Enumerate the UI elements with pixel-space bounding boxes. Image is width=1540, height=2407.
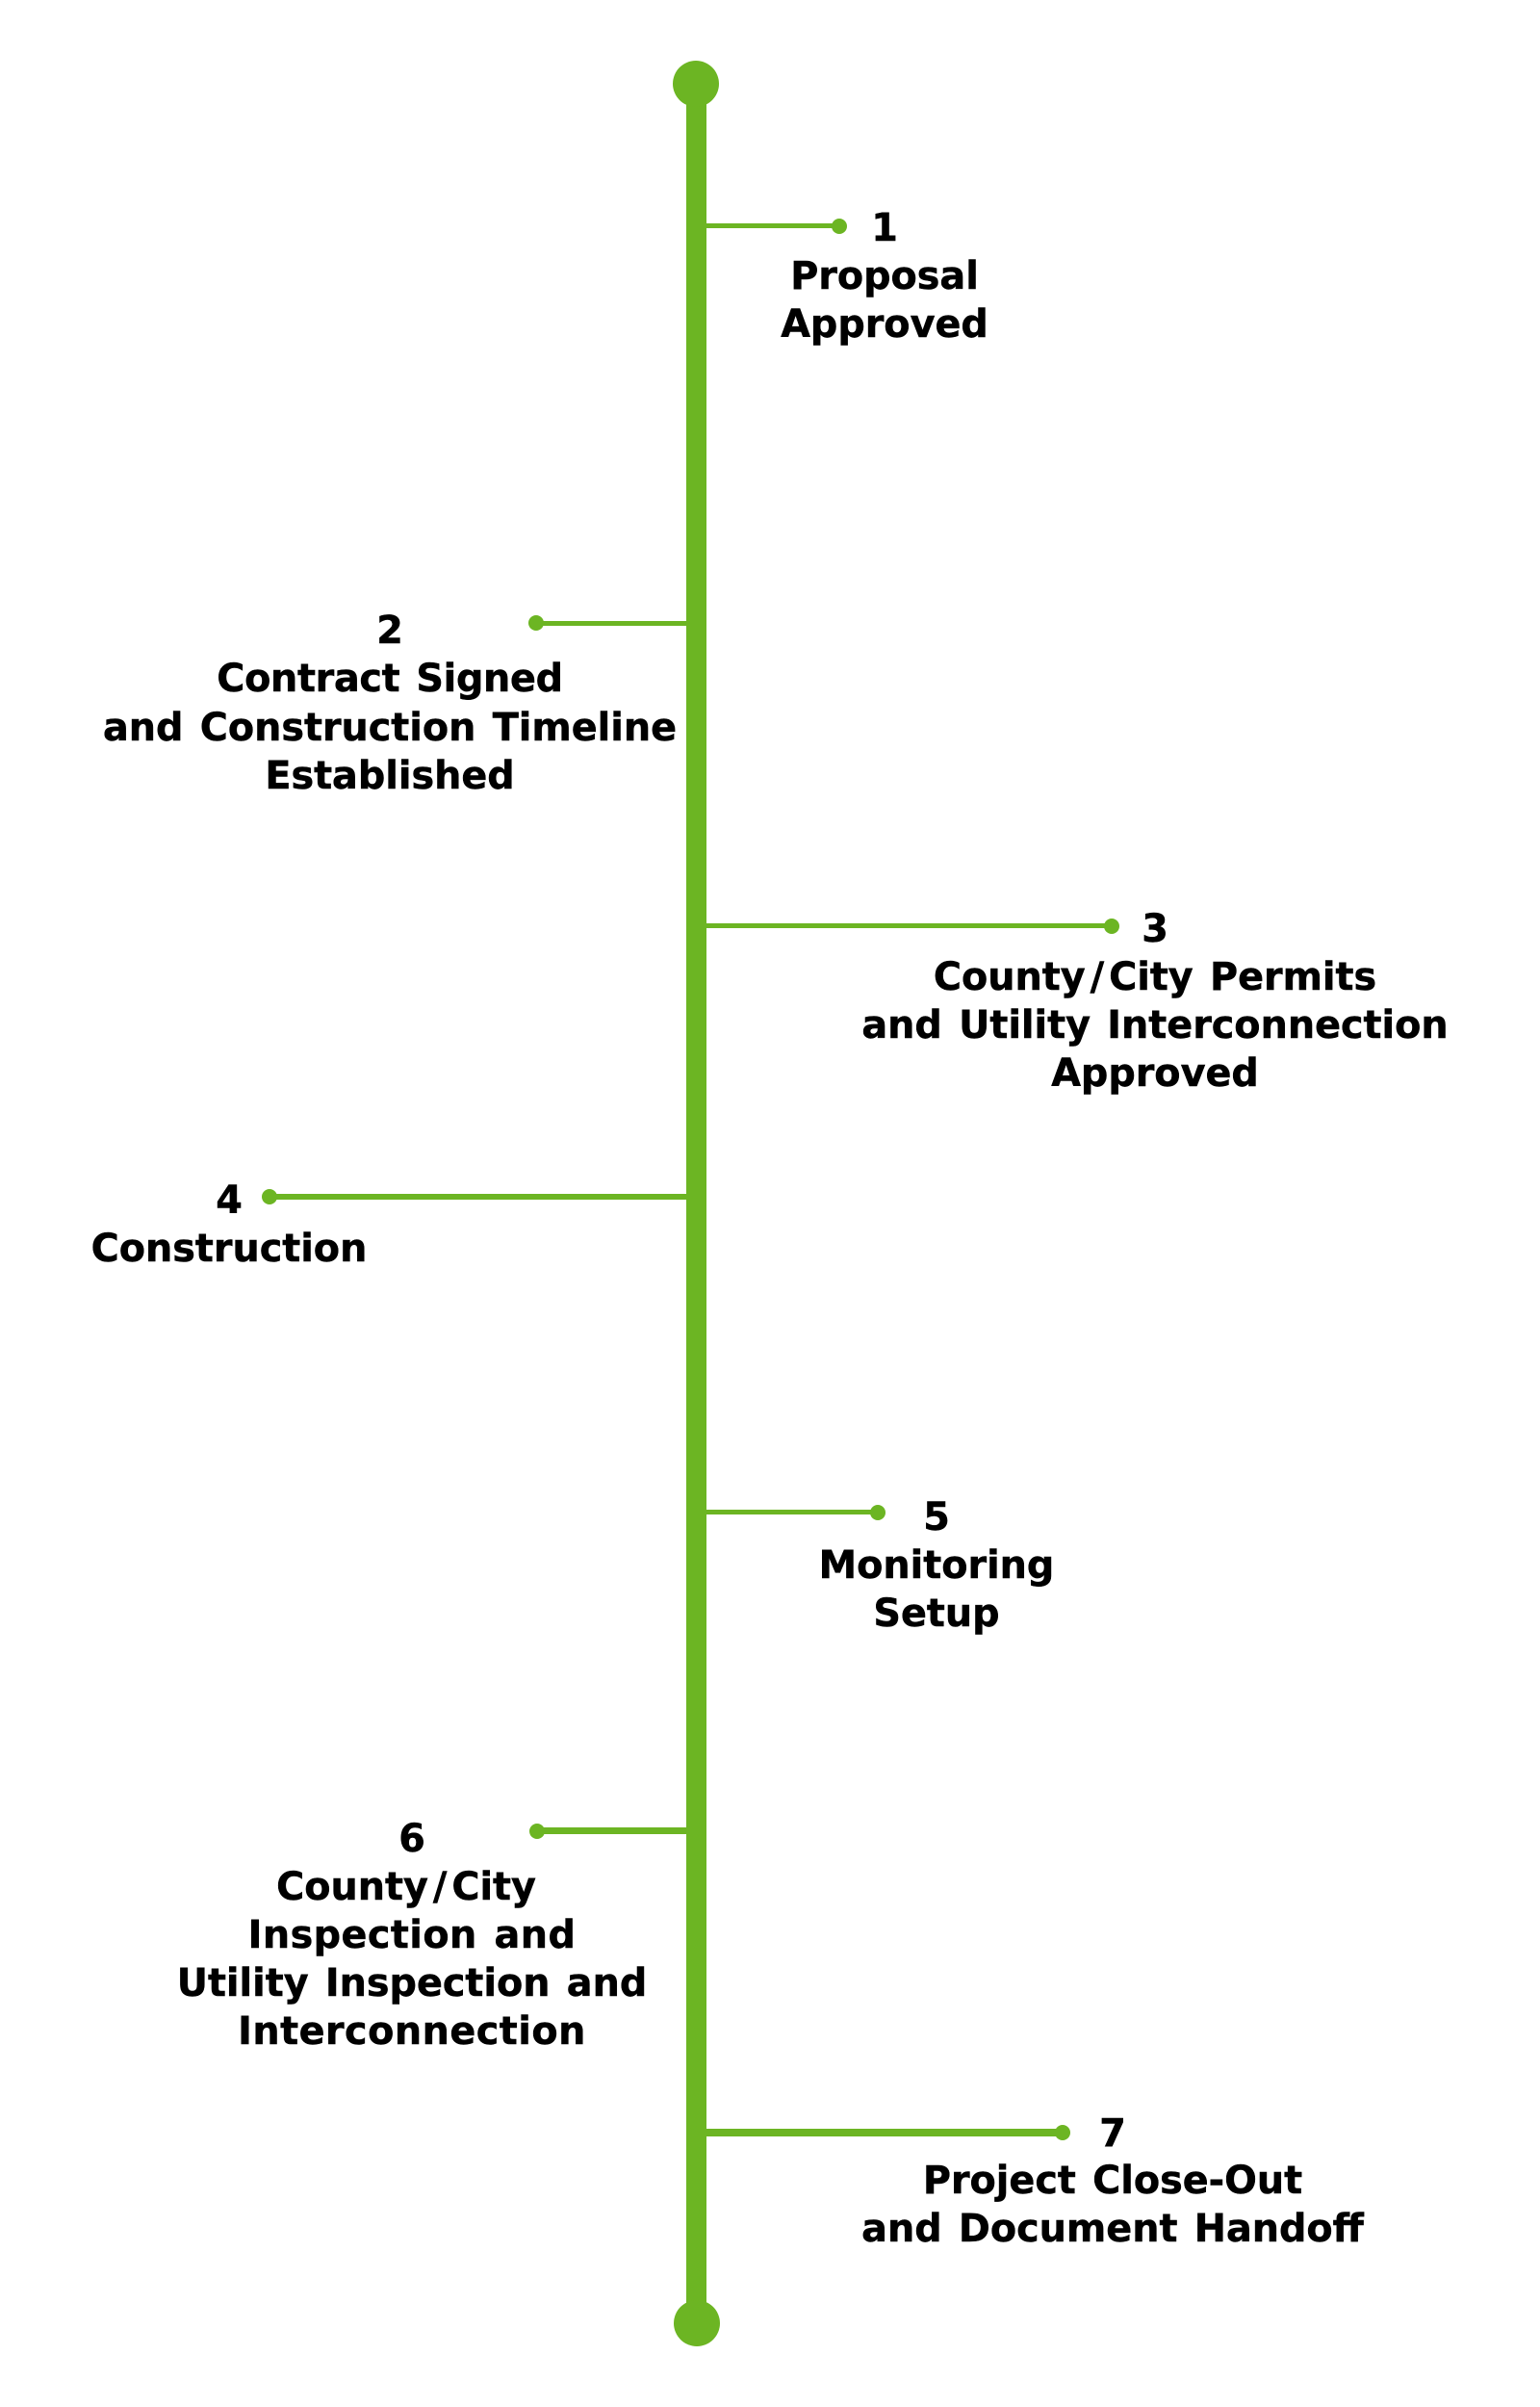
label 1: Approved (781, 302, 988, 347)
label 6: Interconnection (238, 2009, 586, 2054)
connector 6 (529, 1824, 686, 1839)
timeline trunk (673, 61, 720, 2346)
label 5: 5 (923, 1495, 950, 1540)
label 6: Utility Inspection and (177, 1961, 647, 2006)
step 5: Monitoring Setup (706, 1495, 1054, 1636)
label 6: County/City (276, 1865, 536, 1909)
label 2: Established (265, 754, 515, 798)
step 3: Permits and Interconnection Approved (706, 907, 1449, 1096)
connector 1 (706, 219, 847, 234)
label 5: Setup (873, 1592, 1000, 1636)
label 2: Contract Signed (217, 657, 563, 701)
label 3: and Utility Interconnection (861, 1003, 1449, 1048)
label 2: and Construction Timeline (103, 706, 677, 750)
label 6: Inspection and (248, 1913, 576, 1957)
label 1: 1 (871, 206, 898, 250)
connector 5 (706, 1505, 886, 1520)
label 4: Construction (91, 1227, 367, 1271)
connector 2 (528, 615, 686, 631)
step 6: County/City Inspection (177, 1817, 686, 2054)
label 2: 2 (376, 608, 403, 653)
label 7: 7 (1099, 2111, 1126, 2156)
step 7: Project Close-Out (706, 2111, 1365, 2251)
label 3: 3 (1142, 907, 1168, 951)
connector 4 (262, 1189, 686, 1204)
step 1: Proposal Approved (706, 206, 988, 347)
label 1: Proposal (790, 254, 979, 298)
label 5: Monitoring (819, 1543, 1054, 1588)
label 6: 6 (398, 1817, 425, 1861)
label 3: County/City Permits (934, 955, 1376, 999)
step 4: Construction (91, 1178, 686, 1271)
label 4: 4 (216, 1178, 243, 1223)
label 3: Approved (1051, 1051, 1259, 1096)
connector 7 (706, 2125, 1070, 2140)
label 7: Project Close-Out (923, 2159, 1302, 2203)
label 7: and Document Handoff (861, 2207, 1365, 2251)
connector 3 (706, 919, 1119, 934)
step 2: Contract Signed (103, 608, 686, 798)
